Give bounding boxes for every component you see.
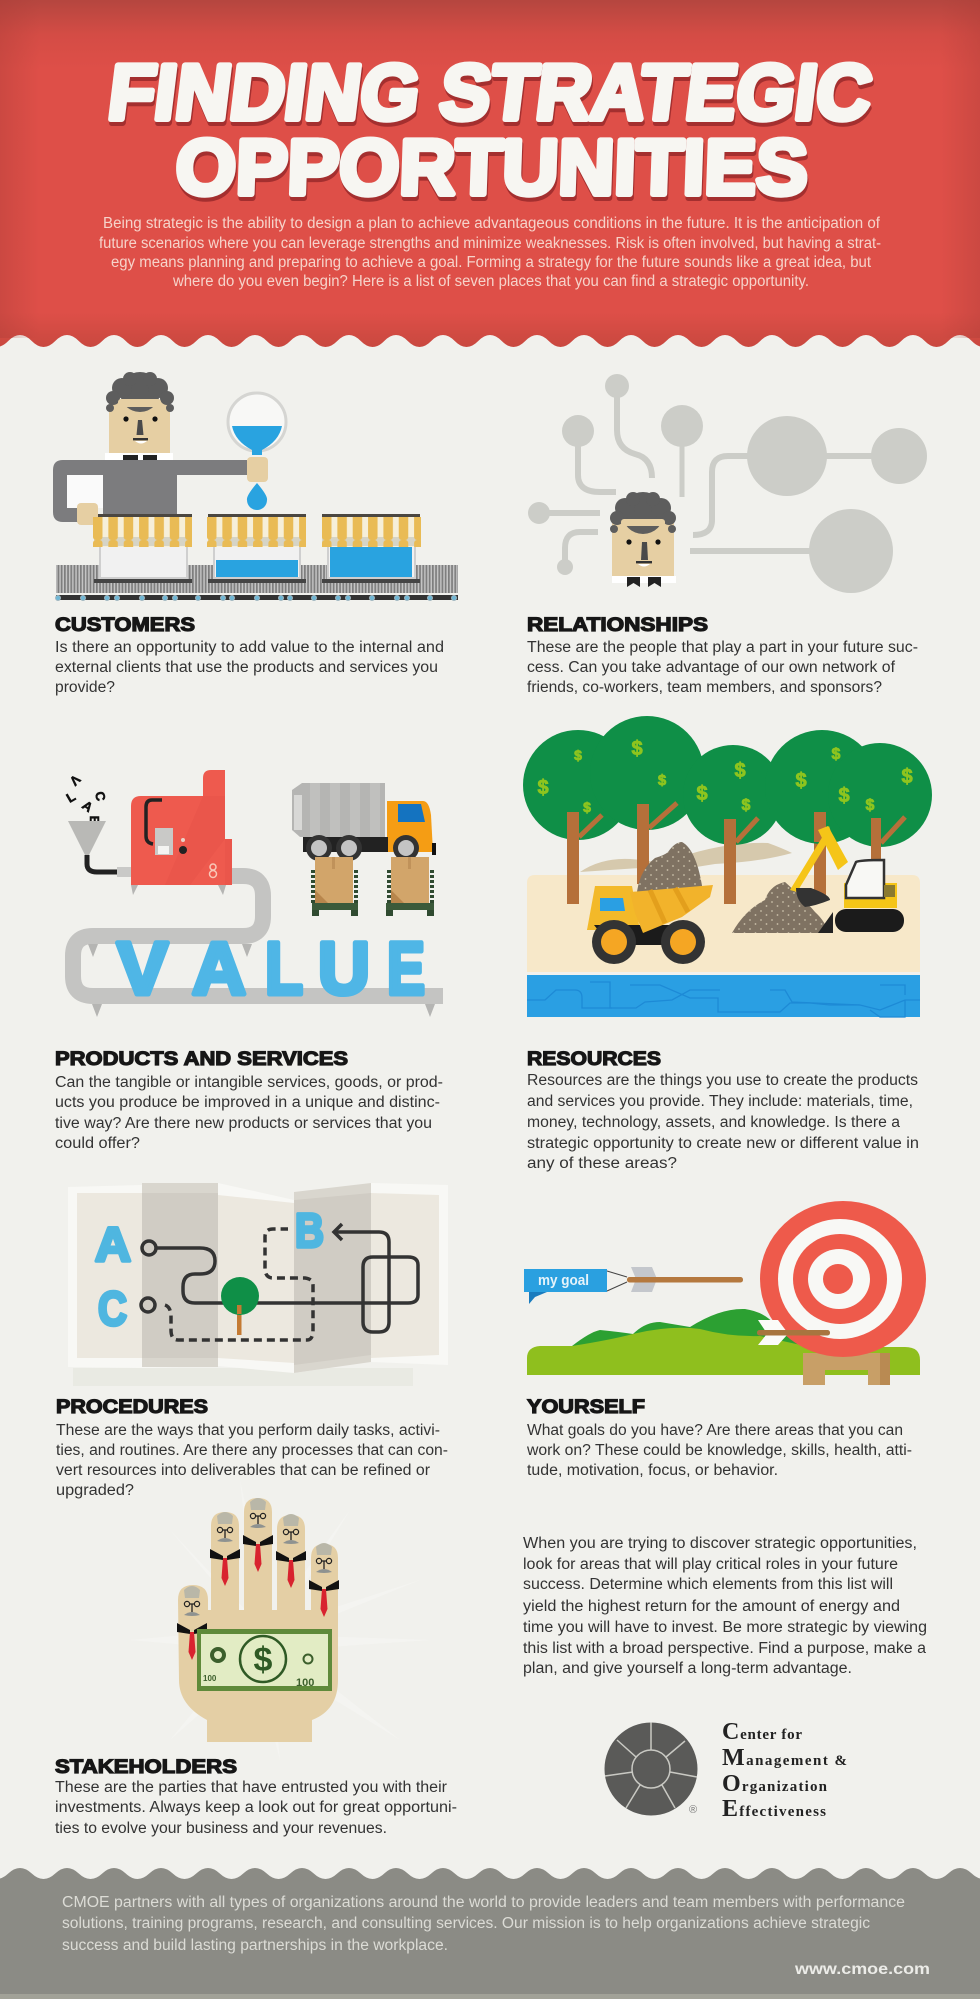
text: procedures: vert resources into deliverables that can be refined or (56, 1462, 430, 1479)
water with circuit lines (527, 975, 920, 1017)
cups (93, 514, 421, 583)
map letters: B (295, 1205, 324, 1258)
logo wordmark: Effectiveness (722, 1796, 826, 1822)
closing paragraph: yield the highest return for the amount of energy and (523, 1598, 900, 1615)
text: resources: strategic opportunity to create new or different value in (527, 1135, 919, 1152)
text: products and services (55, 1074, 443, 1152)
excavator (790, 826, 904, 933)
dollar signs: $ (631, 738, 643, 760)
closing paragraph: this list with a broad perspective. Find a purpose, make a (523, 1640, 926, 1657)
target (760, 1201, 926, 1357)
funnel and hose (68, 821, 142, 877)
heading: resources: RESOURCES (527, 1049, 661, 1070)
text: products and services: could offer? (55, 1135, 140, 1152)
dollar signs: $ (734, 760, 746, 782)
text: stakeholders: These are the parties that have entrusted you with their (55, 1779, 447, 1796)
VALUE letters: V (117, 927, 168, 1010)
flying arrow with banner (524, 1267, 743, 1304)
closing paragraph: look for areas that will play critical roles in your future (523, 1556, 898, 1573)
text: stakeholders (55, 1779, 457, 1837)
dollar signs: $ (574, 747, 582, 763)
dollar signs: $ (832, 746, 841, 763)
distant hills (580, 843, 792, 872)
text: relationships: cess. Can you take advantage of our own network of (527, 659, 896, 676)
text: procedures: ties, and routines. Are there any processes that can con- (56, 1442, 448, 1459)
text: resources: money, technology, assets, and knowledge. Is there a (527, 1114, 900, 1131)
flying arrow with banner: my goal (538, 1272, 589, 1289)
intro text: where do you even begin? Here is a list of seven places that you can find a strategic opportunity. (172, 273, 809, 290)
dollar signs: $ (795, 770, 807, 792)
logo wordmark: Management & (722, 1745, 847, 1771)
text: customers (55, 639, 444, 696)
logo wordmark: Organization (722, 1771, 828, 1797)
text: procedures: upgraded? (56, 1482, 134, 1499)
hand (178, 1498, 338, 1742)
VALUE letters: E (387, 927, 425, 1010)
intro text (99, 215, 881, 290)
falling letters: E (87, 816, 102, 825)
text: yourself: tude, motivation, focus, or behavior. (527, 1462, 778, 1479)
illustration: yourself target (524, 1201, 926, 1385)
CMOE logo (604, 1719, 847, 1822)
heading: products and services: PRODUCTS AND SERVICES (55, 1049, 348, 1070)
illustration: procedures map (68, 1183, 448, 1386)
title: OPPORTUNITIES (174, 123, 809, 211)
VALUE letters: L (265, 927, 303, 1010)
illustration: stakeholders hand (130, 1480, 430, 1760)
dollar signs (537, 738, 913, 815)
dollar signs: $ (838, 785, 850, 807)
finger faces (177, 1498, 339, 1660)
heading: customers: CUSTOMERS (55, 615, 195, 636)
website: www.cmoe.com (794, 1961, 930, 1978)
logo wheel (604, 1722, 698, 1816)
text: products and services: tive way? Are there new products or services that you (55, 1115, 432, 1132)
footer text: CMOE partners with all types of organizations around the world to provide leaders and team members with performance (62, 1894, 905, 1911)
target stand (803, 1353, 890, 1385)
intro text: egy means planning and preparing to achieve a goal. Forming a strategy for the future sounds like a great idea, but (111, 254, 872, 271)
VALUE letters: A (192, 927, 246, 1010)
map tree (221, 1277, 259, 1335)
falling letters: A (79, 797, 96, 816)
illustration: customers conveyor (53, 372, 458, 600)
dollar signs: $ (742, 797, 751, 814)
footer text: success and build lasting partnerships in the workplace. (62, 1937, 448, 1954)
text: customers: Is there an opportunity to add value to the internal and (55, 639, 444, 656)
solid route (142, 1224, 418, 1332)
dollar bill: 100 (203, 1674, 217, 1683)
map letters (95, 1205, 324, 1336)
rock piles (637, 842, 828, 933)
logo wheel: ® (689, 1804, 697, 1816)
text: relationships: These are the people that play a part in your future suc- (527, 639, 918, 656)
falling letters: V (67, 772, 84, 789)
intro text: Being strategic is the ability to design a plan to achieve advantageous conditions in the future. It is the anticipation of (103, 215, 881, 232)
title: FINDING STRATEGIC (104, 48, 877, 136)
text: resources: any of these areas? (527, 1155, 677, 1172)
dashed route (141, 1229, 313, 1340)
map letters: A (95, 1219, 131, 1272)
map letters: C (98, 1283, 127, 1336)
arrow in target (757, 1320, 830, 1345)
text: resources (527, 1072, 919, 1172)
truck (292, 783, 436, 861)
VALUE letters (117, 927, 425, 1010)
heading: relationships: RELATIONSHIPS (527, 615, 708, 636)
money trees (523, 716, 932, 904)
falling letters: C (92, 790, 109, 803)
text: customers: external clients that use the products and services you (55, 659, 438, 676)
dollar signs: $ (537, 777, 549, 799)
falling letters (64, 772, 109, 825)
closing paragraph: success. Determine which elements from this list will (523, 1576, 893, 1593)
footer band (0, 1868, 980, 1999)
header band (0, 0, 980, 347)
dollar bill (197, 1629, 332, 1691)
cartons on pallets (312, 857, 434, 916)
text: yourself: work on? These could be knowledge, skills, health, atti- (526, 1442, 912, 1459)
intro text: future scenarios where you can leverage strengths and minimize weaknesses. Risk is often involved, but having a strat- (99, 235, 881, 252)
man head (610, 492, 676, 587)
dollar signs: $ (658, 772, 667, 789)
man pouring (53, 372, 268, 525)
dollar bill: $ (254, 1641, 273, 1679)
illustration: products value machine (64, 770, 443, 1017)
light rays (130, 1480, 430, 1760)
flask and drop (228, 393, 286, 510)
dollar signs: $ (901, 766, 913, 788)
text: procedures (56, 1422, 448, 1499)
falling letters: L (64, 789, 78, 806)
text: products and services: ucts you produce be improved in a unique and distinc- (55, 1094, 440, 1111)
dollar bill: 100 (296, 1677, 314, 1689)
dollar signs: $ (866, 797, 875, 814)
dollar signs: $ (583, 799, 591, 815)
network lines and nodes (528, 374, 927, 593)
dollar signs: $ (696, 783, 708, 805)
map sheets (68, 1183, 448, 1386)
logo wordmark: Center for (722, 1719, 802, 1745)
closing paragraph (523, 1535, 927, 1677)
closing paragraph: plan, and give yourself a long-term advantage. (523, 1660, 852, 1677)
text: resources: and services you provide. They include: materials, time, (527, 1093, 913, 1110)
text: stakeholders: investments. Always keep a look out for great opportuni- (55, 1799, 457, 1816)
illustration: relationships network (528, 374, 927, 593)
conveyor pipe (73, 876, 443, 1017)
lawn (527, 1328, 920, 1375)
text: resources: Resources are the things you use to create the products (527, 1072, 918, 1089)
dump truck (587, 885, 713, 964)
text: stakeholders: ties to evolve your business and your revenues. (55, 1820, 387, 1837)
text: products and services: Can the tangible or intangible services, goods, or prod- (55, 1074, 443, 1091)
text: procedures: These are the ways that you perform daily tasks, activi- (56, 1422, 440, 1439)
footer text: solutions, training programs, research, and consulting services. Our mission is to help organizations achieve strategic (62, 1915, 870, 1932)
closing paragraph: When you are trying to discover strategic opportunities, (523, 1535, 917, 1552)
illustration: resources mining (523, 716, 932, 1017)
heading: yourself: YOURSELF (527, 1397, 645, 1418)
heading: stakeholders: STAKEHOLDERS (55, 1757, 237, 1778)
text: relationships (527, 639, 918, 696)
heading: procedures: PROCEDURES (56, 1397, 208, 1418)
title (104, 48, 877, 211)
text: customers: provide? (55, 679, 115, 696)
closing paragraph: time you will have to invest. Be more strategic by viewing (523, 1619, 927, 1636)
footer text (62, 1894, 905, 1954)
text: yourself (526, 1422, 912, 1479)
hills (572, 1309, 800, 1346)
text: yourself: What goals do you have? Are there areas that you can (527, 1422, 903, 1439)
logo wordmark (722, 1719, 847, 1822)
VALUE letters: U (318, 927, 370, 1010)
conveyor belt (56, 565, 458, 600)
text: relationships: friends, co-workers, team members, and sponsors? (527, 679, 882, 696)
red machine (131, 770, 232, 885)
sand (527, 875, 920, 972)
